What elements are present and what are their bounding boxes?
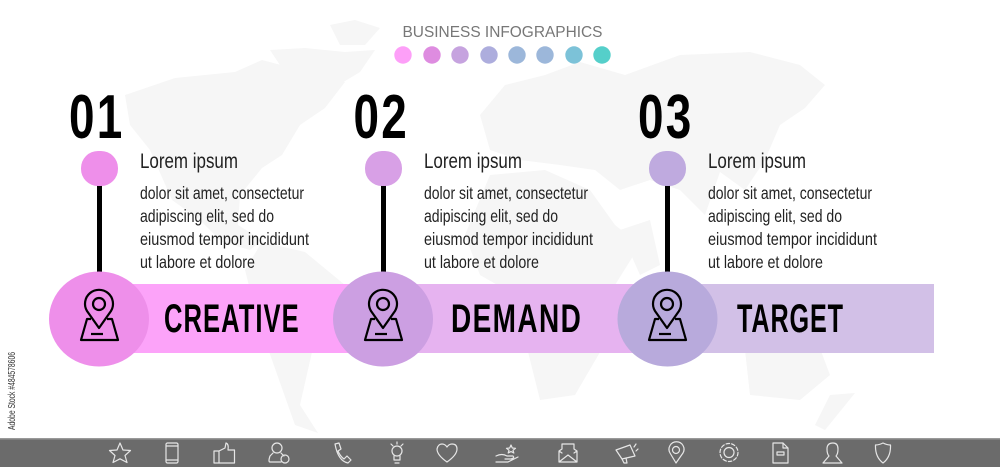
icon: shield bbox=[875, 443, 891, 463]
icon: light bulb bbox=[391, 442, 403, 463]
step 2: DEMAND bbox=[451, 297, 582, 341]
step 2: Lorem ipsum bbox=[424, 150, 522, 173]
world map background bbox=[125, 20, 855, 433]
step 1: dolor sit amet, consectetur bbox=[140, 183, 304, 203]
icon: star bbox=[110, 443, 130, 462]
icon: phone bbox=[166, 443, 178, 463]
bottom icon bar bbox=[0, 438, 1000, 467]
step 3: Lorem ipsum bbox=[708, 150, 806, 173]
icon: thumbs up bbox=[214, 443, 234, 463]
step 3: dolor sit amet, consectetur bbox=[708, 183, 872, 203]
step 1: Lorem ipsum bbox=[140, 150, 238, 173]
step 2: adipiscing elit, sed do bbox=[424, 206, 558, 226]
header: business infographics bbox=[394, 24, 611, 64]
icon: hand with star bbox=[496, 445, 518, 462]
step 1: ut labore et dolore bbox=[140, 252, 255, 272]
step 1: CREATIVE bbox=[164, 297, 300, 342]
step 2: dolor sit amet, consectetur bbox=[424, 183, 588, 203]
step 1: adipiscing elit, sed do bbox=[140, 206, 274, 226]
icon: map pin 2 bbox=[365, 290, 402, 340]
stock id side label: Adobe Stock #484578606 bbox=[7, 352, 18, 430]
header: business infographics: BUSINESS INFOGRAPHICS bbox=[402, 24, 602, 41]
icon: megaphone bbox=[616, 444, 638, 463]
step 3: ut labore et dolore bbox=[708, 252, 823, 272]
ribbon segments bbox=[130, 284, 934, 353]
step 3: eiusmod tempor incididunt bbox=[708, 229, 877, 249]
icon: document bbox=[773, 443, 788, 463]
step 2 bbox=[333, 82, 593, 366]
icon: person bbox=[823, 443, 842, 463]
step 1: eiusmod tempor incididunt bbox=[140, 229, 309, 249]
step 3: TARGET bbox=[737, 297, 844, 342]
step 3: adipiscing elit, sed do bbox=[708, 206, 842, 226]
icon: heart bbox=[437, 444, 457, 462]
icon: telephone bbox=[335, 443, 351, 463]
step 2: 02 bbox=[354, 82, 409, 152]
step 2: eiusmod tempor incididunt bbox=[424, 229, 593, 249]
icon: map pin 3 bbox=[649, 290, 686, 340]
step 3 bbox=[618, 82, 877, 366]
icon: open envelope bbox=[559, 444, 577, 462]
step 1: 01 bbox=[69, 82, 124, 152]
icon: location pin bbox=[669, 442, 684, 463]
step 1 bbox=[49, 82, 309, 366]
icon: user check bbox=[269, 443, 289, 463]
icon: gear bbox=[720, 444, 738, 462]
icon: map pin 1 bbox=[81, 290, 118, 340]
step 2: ut labore et dolore bbox=[424, 252, 539, 272]
step 3: 03 bbox=[638, 82, 693, 152]
